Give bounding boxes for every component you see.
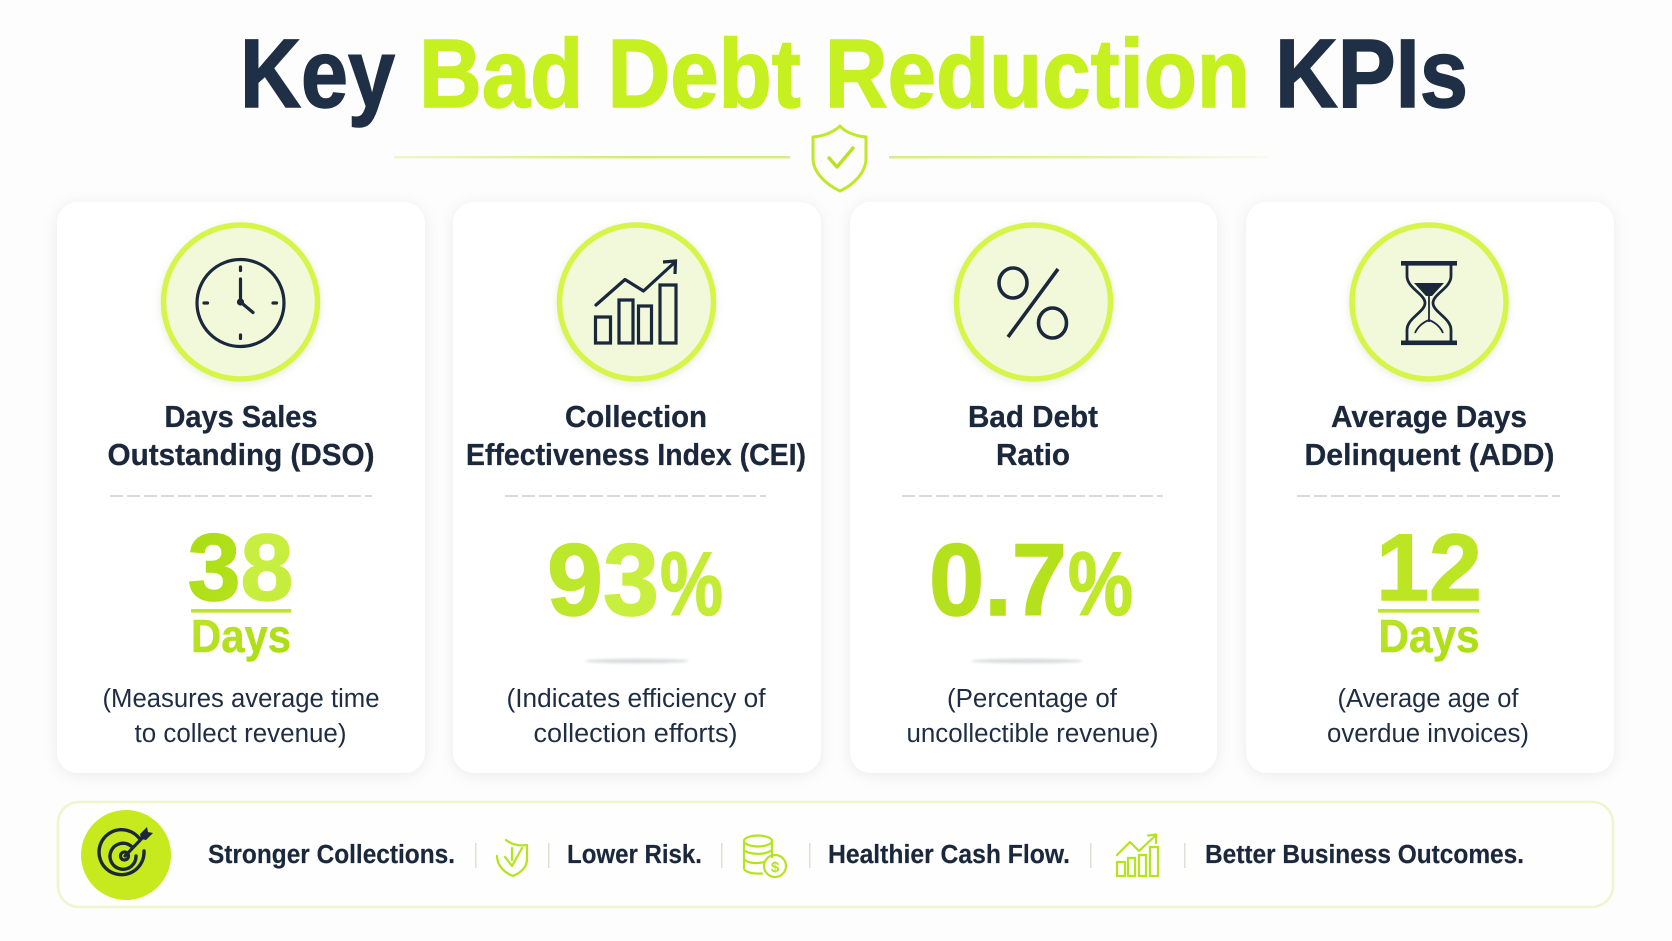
icon: shield check <box>497 840 527 876</box>
metric: 0.7%: 0.7 <box>929 523 1067 637</box>
banner: outcomes strip <box>58 802 1613 907</box>
metric: 93%: % <box>660 535 723 635</box>
panel: Days Sales Outstanding: to collect revenue) <box>134 720 346 748</box>
icon: coins: $ <box>771 859 780 876</box>
text: healthier cash flow: Healthier Cash Flow. <box>828 841 1070 869</box>
panel: Bad Debt Ratio: Ratio <box>996 437 1070 472</box>
text: stronger collections: Stronger Collections. <box>208 841 455 869</box>
icon: shield check <box>813 126 866 191</box>
panel: Average Days Delinquent: overdue invoices) <box>1327 720 1529 748</box>
panel: Bad Debt Ratio <box>850 202 1217 773</box>
title: KPIs <box>1275 19 1468 128</box>
panel: Collection Effectiveness Index: collection efforts) <box>534 720 738 748</box>
metric: 12 Days: Days <box>1378 610 1480 662</box>
description: (Average age of <box>1338 685 1519 713</box>
metric: 93% <box>547 523 723 637</box>
panel: Days Sales Outstanding <box>57 202 425 773</box>
panel: Days Sales Outstanding: Outstanding (DSO) <box>108 437 374 472</box>
title: Key <box>240 19 395 128</box>
metric: 38 Days: Days <box>191 610 291 662</box>
metric: 38 Days: 38 <box>188 515 293 621</box>
panel: Average Days Delinquent: Delinquent (ADD) <box>1304 437 1554 472</box>
icon: clock <box>164 225 318 379</box>
description: (Measures average time <box>102 685 380 713</box>
heading: Days Sales <box>164 399 318 434</box>
metric: 0.7%: % <box>1068 535 1133 635</box>
icon: coins <box>744 836 786 877</box>
metric: 12 Days: 12 <box>1376 515 1482 621</box>
icon: percent <box>956 225 1110 379</box>
heading: Collection <box>565 399 707 434</box>
description: (Percentage of <box>947 685 1118 713</box>
metric: 93%: 93 <box>547 523 659 637</box>
icon: hourglass <box>1352 225 1506 379</box>
heading: Average Days <box>1331 399 1527 434</box>
panel: Bad Debt Ratio: uncollectible revenue) <box>906 720 1158 748</box>
panel: Collection Effectiveness Index: Effectiveness Index (CEI) <box>466 437 806 472</box>
metric: 0.7% <box>929 523 1133 637</box>
icon: rising bar chart <box>560 225 714 379</box>
panel: Collection Effectiveness Index <box>453 202 821 773</box>
description: (Indicates efficiency of <box>506 685 766 713</box>
icon: growth chart <box>1117 834 1158 876</box>
text: lower risk: Lower Risk. <box>567 841 702 869</box>
panel: Average Days Delinquent <box>1246 202 1614 773</box>
icon: target badge <box>81 810 171 900</box>
title divider with shield icon <box>394 126 1269 191</box>
heading: Bad Debt <box>968 399 1098 434</box>
title: Bad Debt Reduction <box>419 19 1250 128</box>
text: better business outcomes: Better Business Outcomes. <box>1205 841 1524 869</box>
